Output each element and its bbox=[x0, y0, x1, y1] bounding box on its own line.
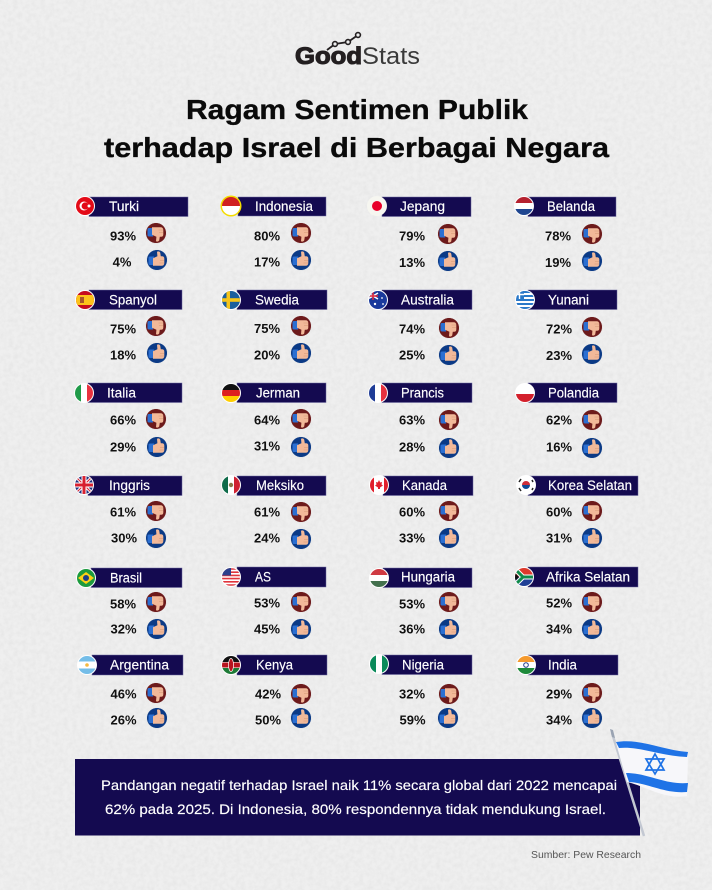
banner bbox=[237, 476, 326, 496]
icon: thumbs up bbox=[439, 438, 459, 458]
icon: thumbs up bbox=[582, 344, 602, 364]
flag: Australia bbox=[368, 290, 388, 310]
icon: thumbs up bbox=[291, 529, 311, 549]
country name: Kenya bbox=[256, 658, 293, 672]
positive share: 17% bbox=[254, 254, 280, 270]
positive share: 19% bbox=[545, 255, 571, 270]
flag: Jerman bbox=[221, 383, 241, 403]
panel: Argentina bbox=[77, 655, 183, 728]
icon: thumbs up bbox=[291, 250, 311, 270]
icon: thumbs up bbox=[291, 708, 311, 728]
country name: Turki bbox=[109, 199, 139, 214]
positive share: 20% bbox=[254, 348, 280, 362]
panel: Korea Selatan bbox=[516, 475, 638, 548]
negative share: 42% bbox=[255, 686, 281, 702]
panel: Yunani bbox=[515, 290, 617, 364]
source: Sumber: Pew Research bbox=[531, 849, 641, 861]
banner bbox=[237, 655, 327, 675]
banner bbox=[237, 383, 326, 402]
icon: thumbs down bbox=[291, 592, 311, 612]
icon: thumbs up bbox=[438, 708, 458, 728]
negative share: 79% bbox=[399, 228, 425, 244]
flag: Korea Selatan bbox=[516, 475, 536, 495]
country name: Spanyol bbox=[109, 292, 157, 308]
icon: thumbs up bbox=[582, 528, 602, 548]
country name: Italia bbox=[107, 386, 136, 400]
banner bbox=[383, 476, 473, 496]
positive share: 24% bbox=[254, 530, 280, 546]
country name: Brasil bbox=[110, 570, 142, 586]
positive share: 16% bbox=[546, 440, 572, 454]
banner bbox=[383, 568, 472, 588]
icon: thumbs up bbox=[147, 437, 167, 457]
negative share: 66% bbox=[110, 412, 136, 428]
flag: India bbox=[516, 655, 536, 675]
negative share: 63% bbox=[399, 412, 425, 428]
banner bbox=[237, 290, 327, 310]
banner bbox=[238, 197, 326, 216]
flag: AS bbox=[221, 567, 241, 587]
flag: Jepang bbox=[367, 196, 387, 216]
banner bbox=[88, 383, 182, 402]
title: Ragam Sentimen Publik bbox=[186, 94, 528, 125]
panel: Prancis bbox=[368, 383, 472, 458]
negative share: 61% bbox=[254, 504, 280, 520]
positive share: 36% bbox=[399, 622, 425, 636]
icon: thumbs down bbox=[582, 317, 602, 337]
positive share: 23% bbox=[546, 348, 572, 363]
negative share: 60% bbox=[399, 504, 425, 520]
negative share: 93% bbox=[110, 228, 136, 244]
flag: Kanada bbox=[369, 475, 389, 495]
country name: India bbox=[548, 658, 577, 672]
negative share: 52% bbox=[546, 596, 572, 610]
icon: thumbs up bbox=[147, 250, 167, 270]
banner bbox=[237, 567, 326, 587]
panel: Hungaria bbox=[369, 568, 472, 639]
flag: Belanda bbox=[514, 196, 534, 216]
icon: thumbs up bbox=[291, 343, 311, 363]
banner bbox=[88, 476, 182, 496]
banner bbox=[528, 383, 617, 402]
icon: thumbs down bbox=[291, 684, 311, 704]
country name: AS bbox=[255, 570, 271, 584]
country name: Yunani bbox=[548, 292, 589, 308]
icon: thumbs down bbox=[439, 410, 459, 430]
positive share: 25% bbox=[399, 348, 425, 362]
country name: Australia bbox=[401, 292, 454, 308]
positive share: 18% bbox=[110, 348, 136, 362]
icon: thumbs down bbox=[291, 409, 311, 429]
positive share: 29% bbox=[110, 440, 136, 454]
flag: Turki bbox=[75, 196, 95, 216]
country name: Prancis bbox=[401, 386, 444, 400]
icon: thumbs down bbox=[438, 224, 458, 244]
panel: Nigeria bbox=[369, 654, 472, 728]
panel: Brasil bbox=[76, 568, 182, 639]
panel: Swedia bbox=[221, 290, 327, 363]
country name: Indonesia bbox=[255, 199, 313, 214]
callout: Pandangan negatif terhadap Israel naik 11% secara global dari 2022 mencapai bbox=[101, 777, 617, 793]
country name: Kanada bbox=[402, 478, 447, 493]
flag: Nigeria bbox=[369, 654, 389, 674]
panel: AS bbox=[221, 567, 326, 639]
country name: Hungaria bbox=[401, 570, 455, 584]
icon: thumbs down bbox=[146, 409, 166, 429]
positive share: 4% bbox=[113, 254, 132, 270]
panel: Kanada bbox=[369, 475, 473, 548]
positive share: 34% bbox=[546, 622, 572, 636]
banner bbox=[89, 197, 188, 216]
negative share: 58% bbox=[110, 596, 136, 612]
icon: thumbs down bbox=[291, 316, 311, 336]
negative share: 53% bbox=[254, 596, 280, 610]
panel: Australia bbox=[368, 290, 472, 365]
negative share: 29% bbox=[546, 686, 572, 702]
positive share: 59% bbox=[399, 712, 426, 728]
country name: Korea Selatan bbox=[548, 478, 632, 493]
icon: thumbs down bbox=[146, 316, 166, 336]
country name: Polandia bbox=[548, 386, 599, 400]
flag: Prancis bbox=[368, 383, 388, 403]
country name: Swedia bbox=[255, 292, 299, 308]
banner bbox=[528, 476, 638, 496]
country name: Nigeria bbox=[402, 658, 444, 672]
flag: Yunani bbox=[515, 290, 535, 310]
icon: thumbs down bbox=[439, 592, 459, 612]
icon: thumbs down bbox=[291, 502, 311, 522]
flag: Argentina bbox=[77, 655, 97, 675]
country name: Inggris bbox=[109, 478, 150, 493]
icon: thumbs down bbox=[439, 684, 459, 704]
negative share: 80% bbox=[254, 228, 280, 244]
icon: thumbs down bbox=[439, 318, 459, 338]
icon: thumbs up bbox=[147, 708, 167, 728]
flag: Italia bbox=[74, 383, 94, 403]
icon: thumbs down bbox=[146, 501, 166, 521]
icon: thumbs up bbox=[291, 437, 311, 457]
banner bbox=[382, 290, 472, 310]
positive share: 31% bbox=[546, 530, 572, 546]
panel: Meksiko bbox=[221, 475, 326, 549]
positive share: 33% bbox=[399, 530, 425, 546]
icon: thumbs up bbox=[439, 345, 459, 365]
positive share: 45% bbox=[254, 622, 280, 636]
banner bbox=[92, 655, 183, 675]
country name: Meksiko bbox=[256, 478, 304, 493]
flag: Kenya bbox=[221, 655, 241, 675]
icon: thumbs up bbox=[146, 528, 166, 548]
negative share: 64% bbox=[254, 412, 280, 428]
icon: thumbs down bbox=[146, 683, 166, 703]
positive share: 28% bbox=[399, 440, 425, 454]
banner bbox=[89, 290, 182, 310]
icon: thumbs down bbox=[582, 501, 602, 521]
banner bbox=[382, 655, 472, 674]
negative share: 46% bbox=[110, 686, 137, 702]
flag: Spanyol bbox=[75, 290, 95, 310]
icon: thumbs up bbox=[291, 619, 311, 639]
negative share: 32% bbox=[399, 686, 425, 702]
negative share: 74% bbox=[399, 322, 425, 336]
panel: India bbox=[516, 655, 618, 728]
negative share: 60% bbox=[546, 504, 572, 520]
flag: Indonesia bbox=[220, 196, 242, 216]
icon: thumbs up bbox=[439, 528, 459, 548]
negative share: 72% bbox=[546, 322, 572, 336]
negative share: 62% bbox=[546, 412, 572, 428]
country name: Jepang bbox=[400, 199, 445, 214]
panel: Italia bbox=[74, 383, 182, 457]
logo: GoodStats: Good bbox=[295, 43, 362, 70]
positive share: 34% bbox=[546, 712, 572, 728]
country name: Belanda bbox=[547, 199, 595, 214]
positive share: 31% bbox=[254, 438, 280, 454]
callout bbox=[75, 759, 640, 836]
icon: thumbs down bbox=[582, 683, 602, 703]
banner bbox=[528, 567, 638, 587]
icon: thumbs up bbox=[582, 251, 602, 271]
logo: GoodStats: Stats bbox=[362, 43, 420, 70]
icon: thumbs up bbox=[439, 619, 459, 639]
panel: Spanyol bbox=[75, 290, 182, 363]
flag: Hungaria bbox=[369, 568, 389, 588]
panel: Belanda bbox=[514, 196, 616, 271]
icon: thumbs down bbox=[146, 223, 166, 243]
panel: Turki bbox=[75, 196, 188, 270]
icon: thumbs up bbox=[147, 619, 167, 639]
flag: Inggris bbox=[74, 475, 94, 495]
banner bbox=[528, 655, 618, 675]
panel: Jerman bbox=[221, 383, 326, 457]
panel: Indonesia bbox=[220, 196, 326, 270]
flag: Meksiko bbox=[221, 475, 241, 495]
banner bbox=[528, 197, 616, 216]
negative share: 78% bbox=[545, 228, 571, 244]
negative share: 53% bbox=[399, 596, 425, 612]
icon: Israel flag bbox=[610, 729, 688, 836]
banner bbox=[382, 197, 471, 216]
negative share: 75% bbox=[254, 321, 280, 336]
logo: GoodStats bbox=[295, 33, 420, 70]
panel: Afrika Selatan bbox=[514, 567, 638, 639]
icon: thumbs up bbox=[438, 251, 458, 271]
flag: Swedia bbox=[221, 290, 241, 310]
country name: Argentina bbox=[110, 658, 169, 672]
icon: thumbs down bbox=[582, 224, 602, 244]
country name: Jerman bbox=[256, 386, 300, 400]
positive share: 13% bbox=[399, 255, 425, 270]
positive share: 32% bbox=[110, 622, 137, 636]
panel: Kenya bbox=[221, 655, 327, 728]
banner bbox=[91, 568, 182, 588]
icon: thumbs down bbox=[582, 592, 602, 612]
positive share: 50% bbox=[255, 712, 281, 728]
negative share: 75% bbox=[110, 322, 136, 336]
icon: thumbs down bbox=[291, 223, 311, 243]
icon: thumbs up bbox=[147, 343, 167, 363]
flag: Brasil bbox=[76, 568, 96, 588]
flag: Polandia bbox=[515, 383, 535, 404]
banner bbox=[528, 290, 617, 310]
icon: thumbs down bbox=[582, 410, 602, 430]
positive share: 26% bbox=[110, 712, 137, 728]
title bbox=[104, 94, 609, 163]
panel: Inggris bbox=[74, 475, 182, 548]
icon: thumbs up bbox=[582, 708, 602, 728]
positive share: 30% bbox=[111, 530, 137, 546]
country name: Afrika Selatan bbox=[546, 570, 630, 584]
panel: Polandia bbox=[515, 383, 617, 458]
icon: thumbs down bbox=[439, 501, 459, 521]
icon: thumbs up bbox=[582, 438, 602, 458]
flag: Afrika Selatan bbox=[514, 567, 534, 587]
title: terhadap Israel di Berbagai Negara bbox=[104, 132, 609, 163]
icon: thumbs down bbox=[146, 592, 166, 612]
banner bbox=[382, 383, 472, 402]
negative share: 61% bbox=[110, 504, 136, 520]
callout: 62% pada 2025. Di Indonesia, 80% respondennya tidak mendukung Israel. bbox=[105, 801, 606, 817]
icon: thumbs up bbox=[582, 619, 602, 639]
panel: Jepang bbox=[367, 196, 471, 271]
